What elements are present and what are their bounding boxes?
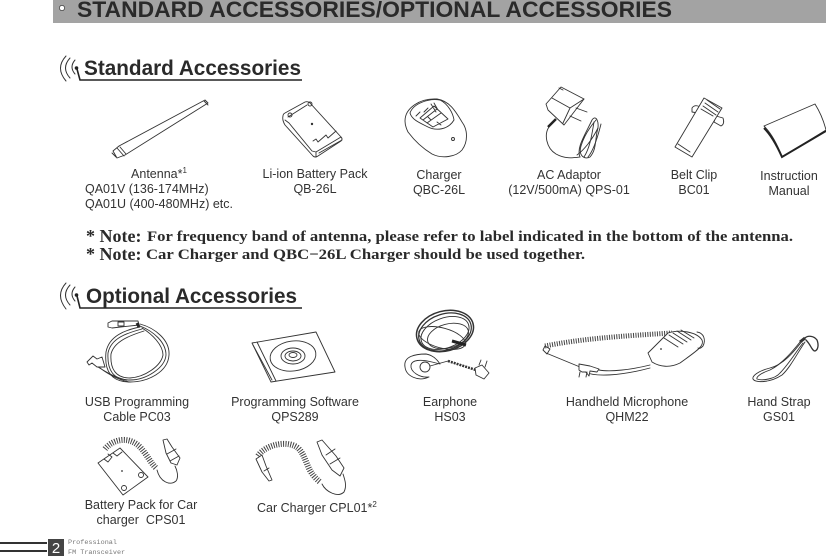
footer: page number and product name xyxy=(0,539,125,556)
icon: earphone xyxy=(405,304,489,379)
label: AC adaptor xyxy=(508,168,630,197)
label: hand strap: Hand Strap xyxy=(747,395,811,409)
label: battery pack for car charger: charger CPS01 xyxy=(97,513,186,527)
footer: page number and product name: Professional xyxy=(68,539,117,547)
label: earphone: Earphone xyxy=(423,395,477,409)
label: USB cable: USB Programming xyxy=(85,395,189,409)
label: instruction manual xyxy=(760,169,818,198)
label: belt clip: BC01 xyxy=(678,183,710,197)
label: hand strap xyxy=(747,395,811,424)
label: antenna: 1 xyxy=(182,166,187,175)
label: antenna: QA01U (400-480MHz) etc. xyxy=(85,197,233,211)
icon: instruction manual xyxy=(764,104,826,157)
label: earphone xyxy=(423,395,477,424)
label: belt clip: Belt Clip xyxy=(671,168,717,182)
label: software xyxy=(231,395,359,424)
label: battery pack xyxy=(263,167,368,196)
label: antenna xyxy=(85,166,233,211)
note: charger: * Note: xyxy=(86,244,141,264)
label: instruction manual: Manual xyxy=(768,184,810,198)
label: charger xyxy=(413,168,465,197)
label: USB cable: Cable PC03 xyxy=(103,410,171,424)
label: car charger: 2 xyxy=(372,500,377,509)
icon: antenna xyxy=(112,100,208,158)
label: charger: QBC-26L xyxy=(413,183,465,197)
label: AC adaptor: AC Adaptor xyxy=(537,168,601,182)
label: antenna: Antenna* xyxy=(131,167,182,181)
label: earphone: HS03 xyxy=(434,410,466,424)
label: instruction manual: Instruction xyxy=(760,169,818,183)
icon: software CD xyxy=(252,332,335,382)
icon: car charger xyxy=(256,440,346,494)
icon: belt clip xyxy=(675,98,724,157)
label: battery pack for car charger xyxy=(85,498,197,527)
label: software: QPS289 xyxy=(271,410,319,424)
icon: USB cable xyxy=(87,321,169,382)
label: USB cable xyxy=(85,395,189,424)
heading: Standard Accessories: Standard Accessories xyxy=(84,56,301,80)
label: handheld microphone xyxy=(566,395,688,424)
icon: charger xyxy=(405,99,466,157)
note: charger xyxy=(86,244,585,264)
label: handheld microphone: Handheld Microphone xyxy=(566,395,688,409)
note: antenna: * Note: xyxy=(86,226,141,246)
icon: handheld microphone xyxy=(543,330,704,377)
icon: battery pack xyxy=(283,102,342,157)
label: battery pack: QB-26L xyxy=(293,182,337,196)
label: AC adaptor: (12V/500mA) QPS-01 xyxy=(508,183,630,197)
label: handheld microphone: QHM22 xyxy=(605,410,649,424)
label: software: Programming Software xyxy=(231,395,359,409)
label: battery pack: Li-ion Battery Pack xyxy=(263,167,368,181)
label: antenna: QA01V (136-174MHz) xyxy=(85,182,209,196)
label: battery pack for car charger: Battery Pack for Car xyxy=(85,498,197,512)
label: belt clip xyxy=(671,168,717,197)
note: charger: Car Charger and QBC−26L Charger should be used together. xyxy=(146,247,585,263)
icon: hand strap xyxy=(753,336,818,382)
note: antenna xyxy=(86,226,793,246)
heading: Optional Accessories: Optional Accessories xyxy=(86,284,297,308)
label: hand strap: GS01 xyxy=(763,410,795,424)
label: car charger: Car Charger CPL01* xyxy=(257,501,372,515)
icon: AC adaptor xyxy=(546,87,601,158)
label: charger: Charger xyxy=(416,168,462,182)
note: antenna: For frequency band of antenna, please refer to label indicated in the bottom of the antenna. xyxy=(147,229,793,245)
icon: battery pack for car charger xyxy=(98,439,180,495)
